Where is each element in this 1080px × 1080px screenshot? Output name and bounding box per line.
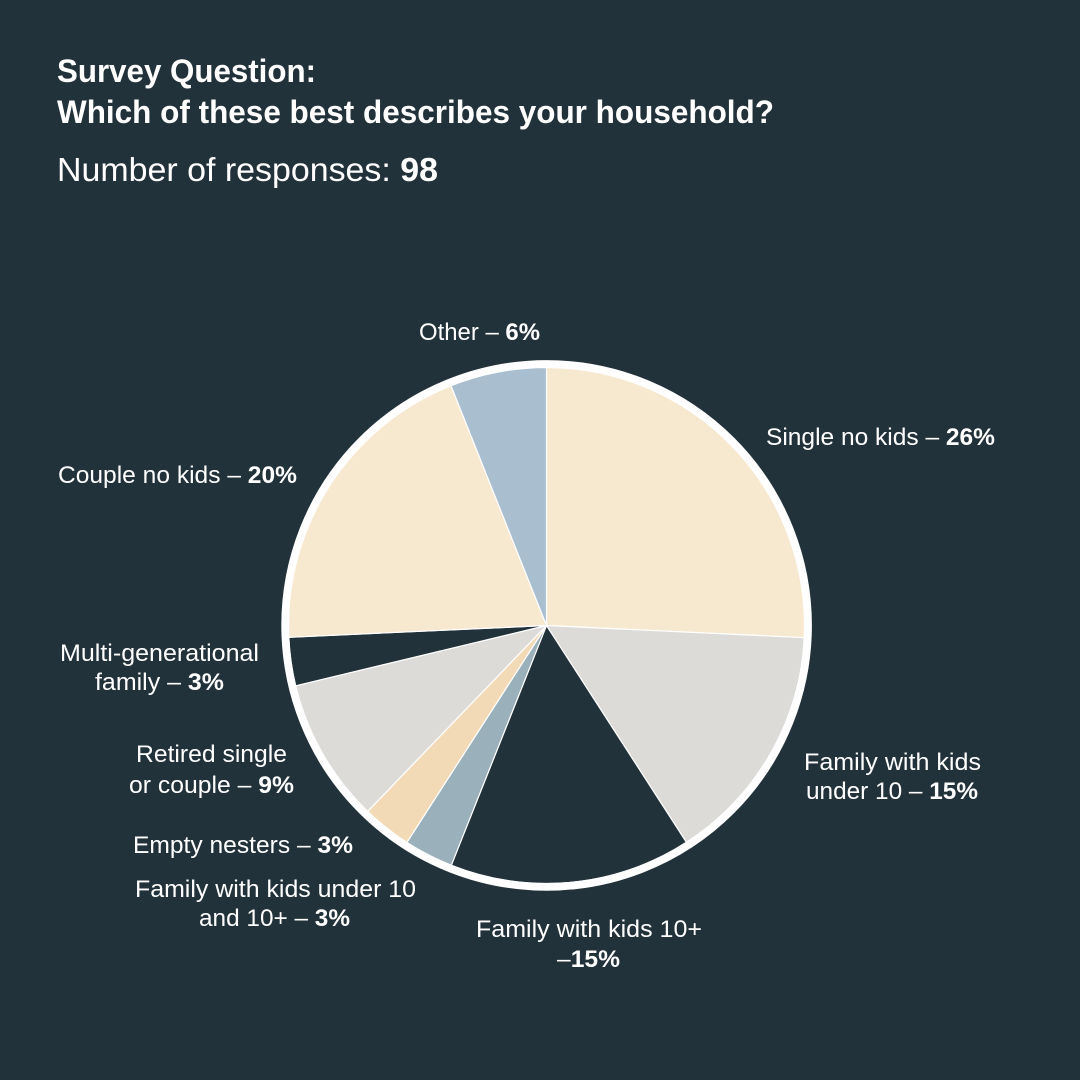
label: other: Other – 6%: [419, 319, 540, 346]
label: family with kids under 10 and 10+: Family with kids under 10: [135, 876, 416, 903]
slice: multi-generational family 3%: [289, 626, 546, 686]
label: family with kids under 10: [804, 749, 981, 805]
label: retired single or couple: or couple – 9%: [129, 772, 294, 799]
label: family with kids 10+: [476, 916, 702, 973]
label: family with kids 10+: Family with kids 10+: [476, 916, 702, 943]
slice: empty nesters 3%: [368, 626, 546, 842]
pie outer ring: [285, 364, 808, 887]
label: family with kids under 10: under 10 – 15%: [806, 778, 978, 805]
label: multi-generational family: [60, 640, 259, 696]
slice: single no kids 26%: [546, 368, 804, 638]
title: Survey Question:: [57, 53, 316, 89]
slice: retired single or couple 9%: [296, 626, 546, 811]
label: family with kids under 10: Family with kids: [804, 749, 981, 776]
label: family with kids under 10 and 10+: [135, 876, 416, 932]
label: single no kids: Single no kids – 26%: [766, 424, 995, 451]
slice: family with kids under 10 15%: [546, 626, 804, 842]
pie chart: [285, 364, 808, 887]
label: retired single or couple: Retired single: [136, 741, 287, 768]
slice: family with kids 10+ 15%: [451, 626, 686, 884]
label: family with kids 10+: –15%: [557, 946, 620, 973]
title: [57, 53, 774, 130]
title: Which of these best describes your household?: [57, 94, 774, 130]
slice: family with kids under 10 and 10+ 3%: [407, 626, 546, 865]
label: empty nesters: Empty nesters – 3%: [133, 832, 353, 859]
label: multi-generational family: family – 3%: [95, 669, 224, 696]
slice: couple no kids 20%: [289, 386, 546, 637]
label: couple no kids: Couple no kids – 20%: [58, 462, 297, 489]
label: retired single or couple: [129, 741, 294, 799]
label: family with kids under 10 and 10+: and 10+ – 3%: [199, 905, 350, 932]
label: multi-generational family: Multi-generational: [60, 640, 259, 667]
slice: other 6%: [451, 367, 546, 626]
response count: Number of responses: 98: [57, 151, 438, 188]
